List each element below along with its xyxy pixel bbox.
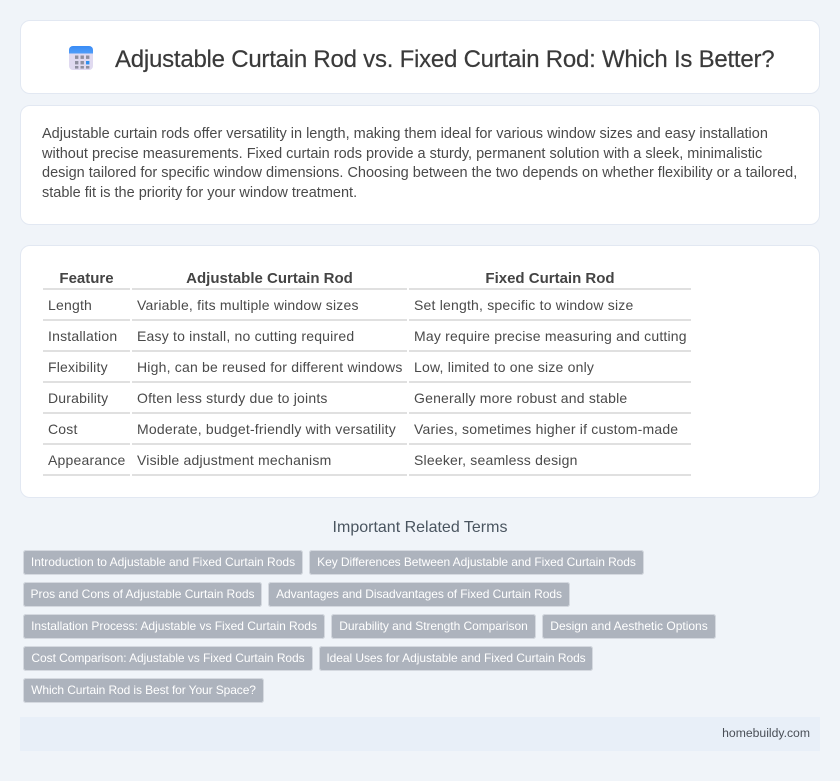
row: appearance: Visible adjustment mechanism: [137, 452, 331, 468]
description text: [42, 126, 797, 201]
header panel: [20, 20, 820, 94]
tag: Which Curtain Rod is Best for Your Space?: [31, 683, 256, 697]
row: appearance: Appearance: [48, 452, 126, 468]
row: cost: Cost: [48, 421, 78, 437]
row: durability: Often less sturdy due to joints: [137, 390, 328, 406]
tag: Ideal Uses for Adjustable and Fixed Curtain Rods: [326, 651, 586, 665]
tag: Design and Aesthetic Options: [550, 619, 708, 633]
row: installation: [48, 328, 687, 344]
description text: Adjustable curtain rods offer versatility in length, making them ideal for various window sizes and easy installation: [42, 126, 768, 142]
comparison table panel: [20, 245, 820, 498]
related terms heading: Important Related Terms: [333, 519, 507, 536]
tag: Durability and Strength Comparison: [339, 619, 528, 633]
row: length: [48, 297, 633, 313]
footer source text: homebuildy.com: [722, 726, 810, 740]
table header: Adjustable Curtain Rod: [186, 270, 353, 287]
tag: [23, 646, 313, 671]
tag: [23, 550, 303, 575]
title: Adjustable Curtain Rod vs. Fixed Curtain Rod: Which Is Better?: [115, 46, 774, 73]
tag: Advantages and Disadvantages of Fixed Curtain Rods: [276, 587, 562, 601]
tag: Introduction to Adjustable and Fixed Curtain Rods: [31, 555, 295, 569]
row: flexibility: High, can be reused for different windows: [137, 359, 403, 375]
row: length: Variable, fits multiple window sizes: [137, 297, 359, 313]
row: flexibility: Low, limited to one size only: [414, 359, 594, 375]
description text: without precise measurements. Fixed curtain rods provide a sturdy, permanent solution with a sleek, minimalistic: [42, 146, 762, 162]
row: length: Length: [48, 297, 92, 313]
description panel: [20, 105, 820, 225]
row: appearance: Sleeker, seamless design: [414, 452, 578, 468]
table header: [59, 270, 615, 287]
row: length: Set length, specific to window size: [414, 297, 633, 313]
row: cost: Moderate, budget-friendly with versatility: [137, 421, 396, 437]
related terms tags: [23, 550, 716, 703]
row: durability: Durability: [48, 390, 108, 406]
footer bar: [20, 717, 820, 751]
tag: [331, 614, 536, 639]
tag: Key Differences Between Adjustable and Fixed Curtain Rods: [317, 555, 636, 569]
description text: stable fit is the priority for your window treatment.: [42, 185, 357, 201]
row: cost: Varies, sometimes higher if custom-made: [414, 421, 678, 437]
tag: [268, 582, 570, 607]
row: installation: Easy to install, no cutting required: [137, 328, 354, 344]
row: installation: May require precise measuring and cutting: [414, 328, 687, 344]
row: appearance: [48, 452, 578, 468]
row: durability: Generally more robust and stable: [414, 390, 627, 406]
tag: [23, 614, 325, 639]
row: flexibility: [48, 359, 594, 375]
tag: [319, 646, 593, 671]
tag: [23, 678, 264, 703]
tag: [23, 582, 262, 607]
row: cost: [48, 421, 678, 437]
tag: Installation Process: Adjustable vs Fixed Curtain Rods: [31, 619, 317, 633]
icon: calendar: [69, 46, 93, 70]
row: installation: Installation: [48, 328, 117, 344]
row: durability: [48, 390, 627, 406]
description text: design tailored for specific window dimensions. Choosing between the two depends on whether flexibility or a tailored,: [42, 165, 797, 181]
tag: Pros and Cons of Adjustable Curtain Rods: [30, 587, 254, 601]
tag: [542, 614, 716, 639]
table header: Fixed Curtain Rod: [485, 270, 615, 287]
row: flexibility: Flexibility: [48, 359, 108, 375]
tag: Cost Comparison: Adjustable vs Fixed Curtain Rods: [31, 651, 305, 665]
table header: Feature: [59, 270, 114, 287]
tag: [309, 550, 644, 575]
